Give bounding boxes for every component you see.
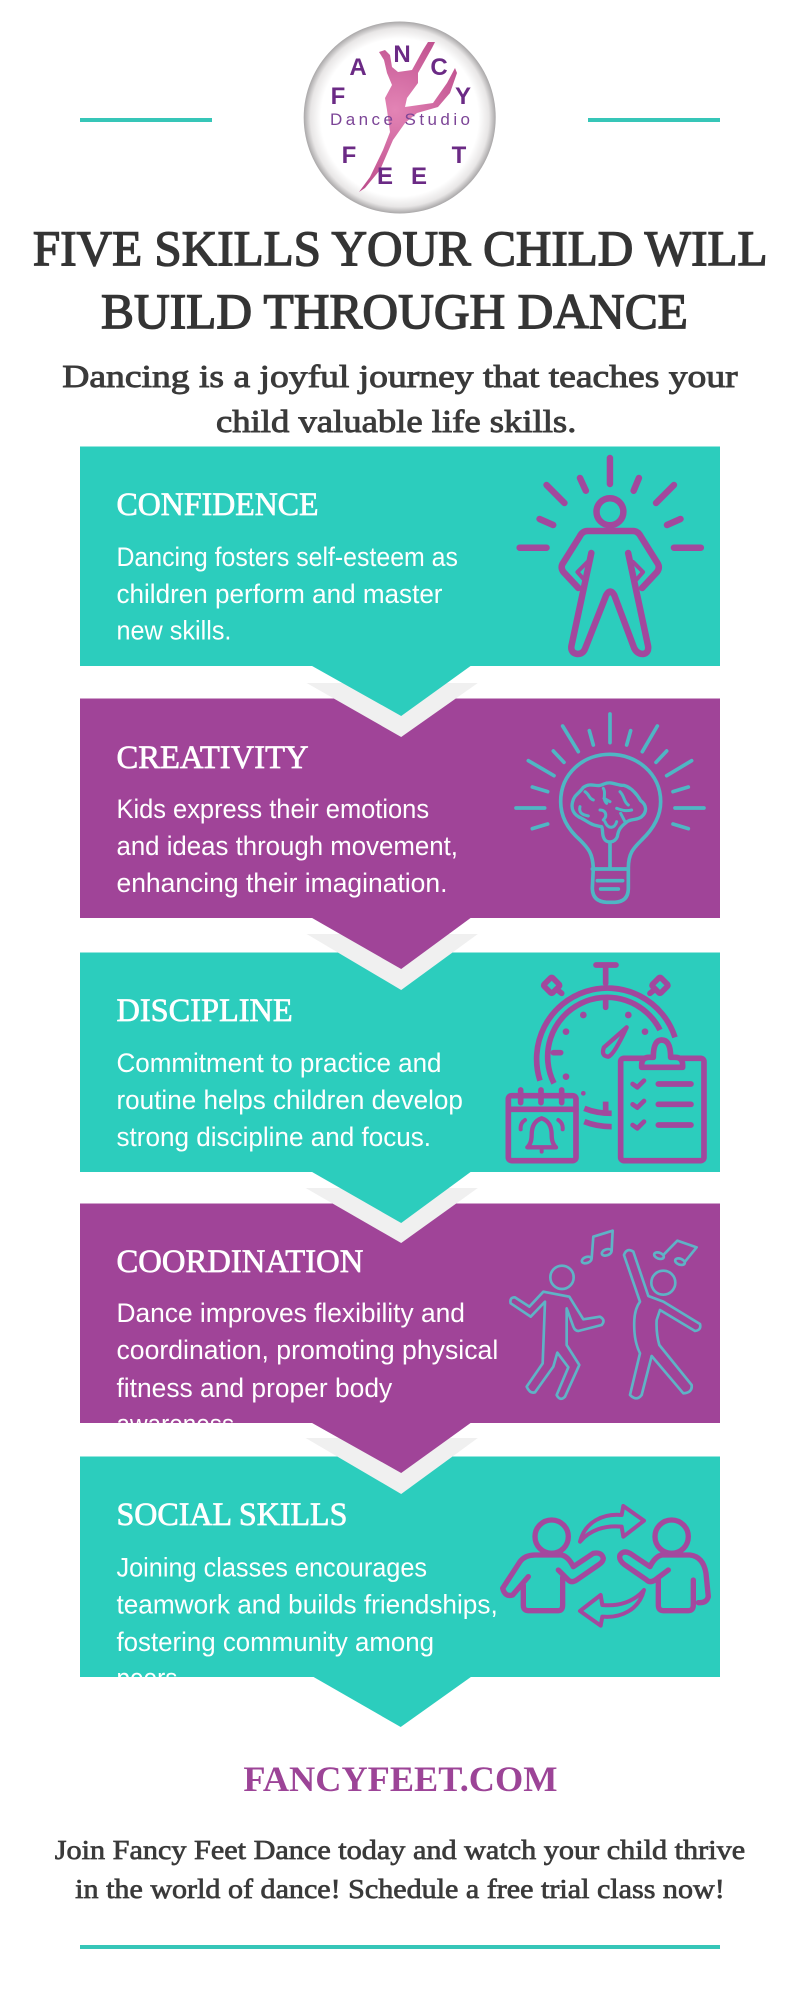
text: creativity description: enhancing their imagination. xyxy=(116,868,447,898)
heading: discipline: DISCIPLINE xyxy=(116,993,293,1029)
logo: Fancy Feet Dance Studio xyxy=(304,22,496,214)
logo lettering: F xyxy=(342,142,356,169)
icon: confident person xyxy=(520,458,701,654)
arrow: social skills to footer xyxy=(314,1677,471,1727)
logo lettering: A xyxy=(349,54,367,81)
logo lettering: E xyxy=(377,163,393,190)
logo dancer silhouette xyxy=(359,42,457,192)
text: coordination description: fitness and proper body xyxy=(116,1373,393,1403)
text: social skills description: peers. xyxy=(116,1663,184,1693)
text: social skills description xyxy=(116,1552,498,1693)
text: creativity description xyxy=(116,794,458,898)
text: social skills description: teamwork and builds friendships, xyxy=(116,1589,498,1620)
logo lettering: N xyxy=(393,41,411,68)
text: discipline description: routine helps children develop xyxy=(116,1085,463,1115)
arrow: creativity to discipline xyxy=(307,918,478,990)
text: confidence description xyxy=(116,542,458,646)
heading: confidence: CONFIDENCE xyxy=(116,487,319,523)
icon: two dancers with music notes xyxy=(510,1231,700,1399)
logo lettering: Y xyxy=(455,83,471,110)
logo tagline: Dance Studio xyxy=(330,110,470,129)
arrow: discipline to coordination xyxy=(306,1172,478,1243)
icon: stopwatch, calendar and checklist xyxy=(508,965,704,1161)
title xyxy=(33,221,768,339)
panel: social skills xyxy=(80,1456,720,1693)
text: discipline description: strong discipline and focus. xyxy=(116,1122,431,1152)
header line: right xyxy=(588,118,720,122)
logo lettering: E xyxy=(411,163,427,190)
text: creativity description: Kids express their emotions xyxy=(116,794,429,824)
text: confidence description: Dancing fosters self-esteem as xyxy=(116,542,458,572)
subtitle: child valuable life skills. xyxy=(216,404,576,439)
arrow: coordination to social skills xyxy=(306,1423,478,1494)
panel: creativity xyxy=(80,698,720,918)
arrow: confidence to creativity xyxy=(307,666,478,737)
logo lettering: T xyxy=(452,142,467,169)
text: confidence description: children perform and master xyxy=(116,579,443,609)
panel: coordination xyxy=(80,1204,720,1439)
title: FIVE SKILLS YOUR CHILD WILL xyxy=(33,221,768,276)
text: coordination description: Dance improves flexibility and xyxy=(116,1298,465,1328)
text: coordination description: awareness. xyxy=(116,1409,241,1439)
logo lettering: F xyxy=(331,83,345,110)
logo lettering xyxy=(331,41,471,190)
heading: social skills: SOCIAL SKILLS xyxy=(116,1497,347,1533)
text: social skills description: Joining classes encourages xyxy=(116,1552,427,1583)
text: social skills description: fostering community among xyxy=(116,1627,434,1657)
header line: left xyxy=(80,118,212,122)
heading: creativity: CREATIVITY xyxy=(116,740,309,776)
text: creativity description: and ideas through movement, xyxy=(116,831,458,861)
subtitle: Dancing is a joyful journey that teaches your xyxy=(62,359,738,394)
subtitle xyxy=(62,359,738,439)
panel: confidence xyxy=(80,446,720,666)
text: confidence description: new skills. xyxy=(116,615,231,646)
closing call to action: Join Fancy Feet Dance today and watch your child thrive xyxy=(55,1835,745,1865)
footer line xyxy=(80,1945,720,1949)
icon: light bulb with brain xyxy=(516,714,704,902)
website link: FANCYFEET.COM xyxy=(243,1759,557,1799)
heading: coordination: COORDINATION xyxy=(116,1244,364,1280)
text: coordination description: coordination, promoting physical xyxy=(116,1335,498,1365)
text: coordination description xyxy=(116,1298,498,1439)
panel: discipline xyxy=(80,952,720,1172)
text: discipline description: Commitment to practice and xyxy=(116,1048,442,1078)
logo lettering: C xyxy=(430,54,448,81)
title: BUILD THROUGH DANCE xyxy=(101,284,688,339)
closing call to action xyxy=(55,1835,745,1904)
closing call to action: in the world of dance! Schedule a free trial class now! xyxy=(75,1874,725,1904)
text: discipline description xyxy=(116,1048,463,1152)
icon: two people exchanging xyxy=(503,1506,708,1626)
